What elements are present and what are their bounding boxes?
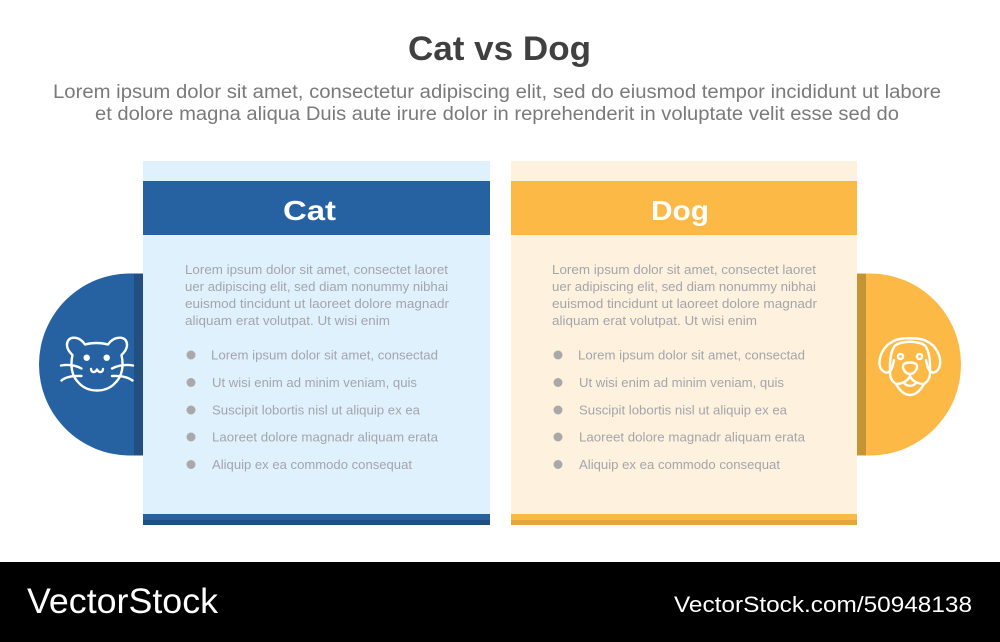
icon badge: dog half circle	[857, 274, 961, 456]
cat footer bar	[143, 514, 490, 525]
icon: dog face	[879, 338, 940, 395]
cat bullet list: Lorem ipsum dolor sit amet, consectad	[211, 348, 438, 362]
icon: cat face	[61, 338, 133, 390]
title: Cat vs Dog	[408, 30, 591, 68]
cat header bar: Cat	[283, 195, 336, 226]
dog bullet list: Ut wisi enim ad minim veniam, quis	[579, 375, 784, 390]
cat description text: euismod tincidunt ut laoreet dolore magnadr	[185, 296, 450, 311]
watermark footer bar: VectorStock.com/50948138	[674, 592, 972, 617]
cat description text: Lorem ipsum dolor sit amet, consectet laoret	[185, 262, 448, 277]
cat bullet list: Aliquip ex ea commodo consequat	[212, 457, 412, 472]
cat description text: uer adipiscing elit, sed diam nonummy nibhai	[185, 279, 448, 294]
panel: dog	[511, 161, 857, 525]
dog bullet list: Suscipit lobortis nisl ut aliquip ex ea	[579, 402, 788, 418]
dog bullet list: Aliquip ex ea commodo consequat	[579, 457, 780, 472]
icon badge: cat half circle	[39, 274, 143, 456]
cat description text	[185, 262, 450, 328]
cat bullet list	[186, 348, 439, 472]
dog bullet list: Lorem ipsum dolor sit amet, consectad	[578, 348, 805, 362]
dog bullet list	[554, 348, 806, 472]
dog description text: Lorem ipsum dolor sit amet, consectet laoret	[552, 262, 816, 277]
dog description text	[552, 262, 818, 328]
cat bullet list: Suscipit lobortis nisl ut aliquip ex ea	[212, 402, 421, 418]
dog header bar	[511, 181, 857, 235]
cat bullet list: Ut wisi enim ad minim veniam, quis	[212, 375, 417, 390]
dog description text: euismod tincidunt ut laoreet dolore magnadr	[552, 296, 818, 311]
dog footer bar	[511, 514, 857, 525]
cat description text: aliquam erat volutpat. Ut wisi enim	[185, 313, 390, 328]
watermark footer bar	[0, 562, 1000, 642]
cat bullet list: Laoreet dolore magnadr aliquam erata	[212, 430, 439, 444]
dog header bar: Dog	[651, 195, 709, 226]
subtitle text block: et dolore magna aliqua Duis aute irure dolor in reprehenderit in voluptate velit esse sed do	[95, 104, 899, 125]
watermark footer bar: VectorStock	[27, 582, 219, 621]
cat header bar	[143, 181, 490, 235]
dog description text: uer adipiscing elit, sed diam nonummy nibhai	[552, 279, 816, 294]
panel: cat	[143, 161, 490, 525]
subtitle text block: Lorem ipsum dolor sit amet, consectetur adipiscing elit, sed do eiusmod tempor incididunt ut labore	[53, 82, 941, 103]
subtitle text block	[53, 82, 941, 125]
dog bullet list: Laoreet dolore magnadr aliquam erata	[579, 430, 806, 444]
dog description text: aliquam erat volutpat. Ut wisi enim	[552, 313, 757, 328]
